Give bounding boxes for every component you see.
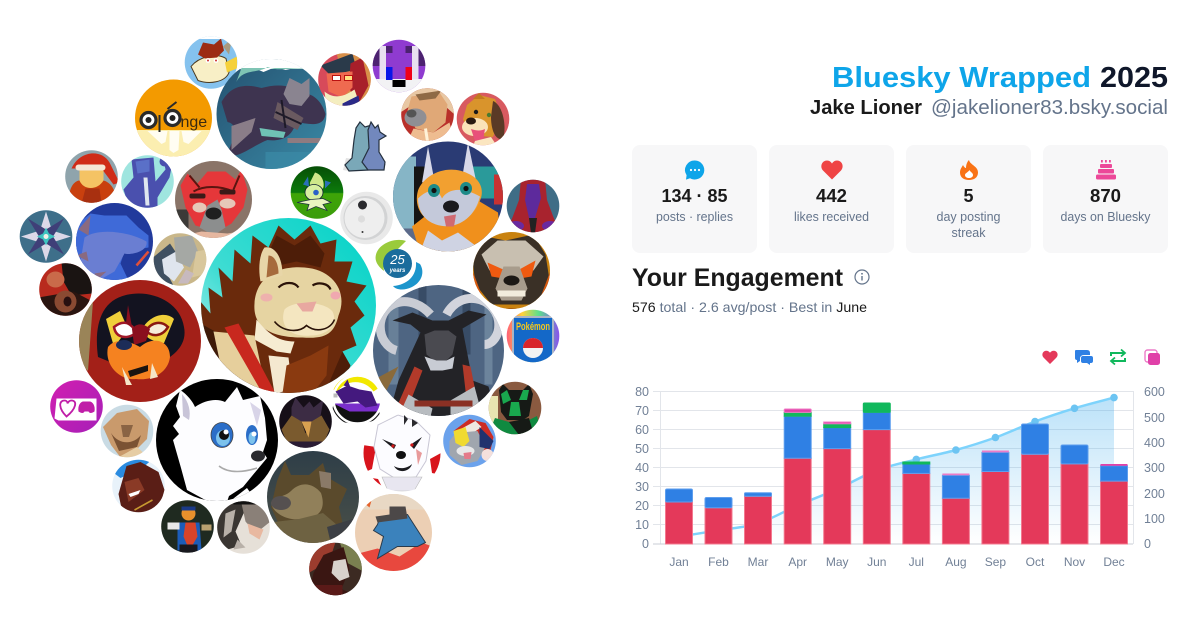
engagement summary: 576 total · 2.6 avg/post · Best in June xyxy=(632,299,867,315)
avatar: green panther fursuit xyxy=(488,381,542,435)
avatar: purple pixel face xyxy=(372,39,426,93)
avatar: orange fox fursuit xyxy=(392,140,504,252)
right axis labels: 100 xyxy=(1144,512,1165,526)
avatar: 25 years badge xyxy=(376,240,422,290)
panel: likes received: likes received xyxy=(794,209,869,224)
month labels: Jul xyxy=(909,555,924,569)
bars: March xyxy=(744,493,772,544)
month labels: Apr xyxy=(788,555,807,569)
month labels: Aug xyxy=(945,555,967,569)
avatar: orange-eyed wolf xyxy=(472,232,550,310)
avatar: goat xyxy=(372,284,504,416)
bars: November xyxy=(1061,445,1088,544)
right axis labels: 500 xyxy=(1144,411,1165,425)
title: 2025 xyxy=(1100,62,1168,94)
month labels: Mar xyxy=(748,555,768,569)
panel: days on Bluesky: 870 xyxy=(1090,186,1121,206)
avatar: cream dragon xyxy=(184,36,238,90)
heading: your engagement: Your Engagement xyxy=(632,264,844,292)
avatar: pokemon card: Pokémon xyxy=(516,321,550,333)
avatar: two blue foxes xyxy=(343,122,386,171)
left axis labels: 30 xyxy=(635,480,649,494)
avatar: tan bear xyxy=(400,88,454,142)
panel: posts and replies: 134 · 85 xyxy=(662,186,728,206)
right axis labels: 0 xyxy=(1144,537,1151,551)
bars: January xyxy=(666,489,692,544)
user name and handle: Jake Lioner xyxy=(810,97,922,119)
avatar: heart and discord badge xyxy=(50,380,104,434)
panel: days on Bluesky: days on Bluesky xyxy=(1060,209,1151,224)
chart gridlines and axes xyxy=(653,391,1134,544)
avatar: blue muscle figure xyxy=(120,154,174,208)
avatar: muscular purple character xyxy=(216,59,326,169)
bars: May xyxy=(824,422,851,544)
icon: quotes legend squares xyxy=(1145,350,1160,365)
avatar: white wolf xyxy=(155,378,279,502)
month labels: Nov xyxy=(1064,555,1085,569)
bars: September xyxy=(982,450,1009,544)
left axis labels: 50 xyxy=(635,442,649,456)
avatar: dark lion xyxy=(112,459,166,513)
avatar: grey map cat xyxy=(153,232,207,286)
avatar: tiger cop xyxy=(160,500,214,554)
avatar: calico cat xyxy=(216,500,270,554)
avatar: 25 years badge: 25 xyxy=(389,252,405,267)
avatar cloud xyxy=(19,36,560,596)
panel: posts and replies: posts · replies xyxy=(656,209,733,224)
left axis labels: 70 xyxy=(635,404,649,418)
legend icons xyxy=(1042,350,1160,365)
avatar: laughing lion xyxy=(100,404,154,458)
avatar: orange logo: nge xyxy=(180,114,207,131)
left axis labels: 0 xyxy=(642,537,649,551)
month labels: Sep xyxy=(985,555,1006,569)
month labels xyxy=(669,555,1125,569)
avatar: pokemon card xyxy=(506,309,560,363)
chart: monthly engagement xyxy=(635,385,1165,569)
left axis labels: 10 xyxy=(635,518,649,532)
avatar: 25 years badge: years xyxy=(389,268,406,274)
panel: day posting streak: streak xyxy=(952,225,986,240)
panel: day posting streak: day posting xyxy=(936,209,1000,224)
left axis labels xyxy=(635,385,649,551)
month labels: Dec xyxy=(1103,555,1125,569)
avatar: white angry wolf xyxy=(363,414,441,492)
bars: October xyxy=(1022,424,1048,544)
icon: info xyxy=(855,270,869,284)
avatar: santa blond dog xyxy=(442,414,496,468)
panel: likes received xyxy=(769,145,894,253)
right axis labels: 600 xyxy=(1144,385,1165,399)
icon: reposts legend arrows xyxy=(1111,350,1125,364)
avatar: hooded purple dragon xyxy=(506,179,560,233)
avatar: pride purple panther xyxy=(332,374,380,424)
left axis labels: 20 xyxy=(635,499,649,513)
panel: day posting streak: 5 xyxy=(964,186,974,206)
avatar: red pup hood xyxy=(174,160,252,238)
panel: day posting streak xyxy=(906,145,1031,253)
avatar: blue t-rex xyxy=(76,202,154,280)
bars: June xyxy=(863,403,890,544)
right axis labels: 400 xyxy=(1144,436,1165,450)
month labels: Jun xyxy=(867,555,886,569)
month labels: Jan xyxy=(669,555,689,569)
left axis labels: 60 xyxy=(635,423,649,437)
icon: speech bubble xyxy=(685,160,704,180)
panel: posts and replies xyxy=(632,145,757,253)
right axis labels: 300 xyxy=(1144,461,1165,475)
user name and handle: @jakelioner83.bsky.social xyxy=(931,97,1168,119)
avatar: red lion fursuit xyxy=(78,279,202,403)
icon: likes legend heart xyxy=(1042,351,1058,364)
avatar: long-haired wolf xyxy=(266,450,360,544)
avatar: blue fox with red jacket xyxy=(354,494,432,572)
avatar: person portrait xyxy=(38,262,92,316)
avatar: smart camera device xyxy=(340,191,394,245)
left axis labels: 40 xyxy=(635,461,649,475)
avatar: celebi xyxy=(290,166,344,220)
icon: replies legend bubbles xyxy=(1075,350,1093,365)
month labels: May xyxy=(826,555,849,569)
avatar: floppy-eared dog xyxy=(456,92,510,146)
avatar: compass star xyxy=(19,210,73,264)
user name and handle xyxy=(810,97,1168,119)
icon: flame xyxy=(960,160,978,180)
bars: August xyxy=(942,474,969,544)
bars: February xyxy=(705,498,732,544)
bars: December xyxy=(1100,464,1128,544)
month labels: Oct xyxy=(1026,555,1045,569)
avatar: griffin xyxy=(278,394,332,450)
icon: heart xyxy=(821,160,843,180)
cumulative area and line xyxy=(679,394,1118,544)
panel: days on Bluesky xyxy=(1043,145,1168,253)
right axis labels: 200 xyxy=(1144,487,1165,501)
month labels: Feb xyxy=(708,555,729,569)
right axis labels xyxy=(1144,385,1165,551)
avatar: main lion xyxy=(200,218,376,394)
bars: July xyxy=(903,462,930,544)
bars: April xyxy=(784,409,811,544)
left axis labels: 80 xyxy=(635,385,649,399)
panel: likes received: 442 xyxy=(816,186,847,206)
avatar: red fox with cap xyxy=(318,52,372,106)
avatar: santa lion xyxy=(64,150,120,204)
avatar: orange logo xyxy=(134,79,212,157)
icon: cake xyxy=(1096,160,1116,180)
title: Bluesky Wrapped xyxy=(832,62,1091,94)
avatar: dark hair portrait xyxy=(308,542,362,596)
